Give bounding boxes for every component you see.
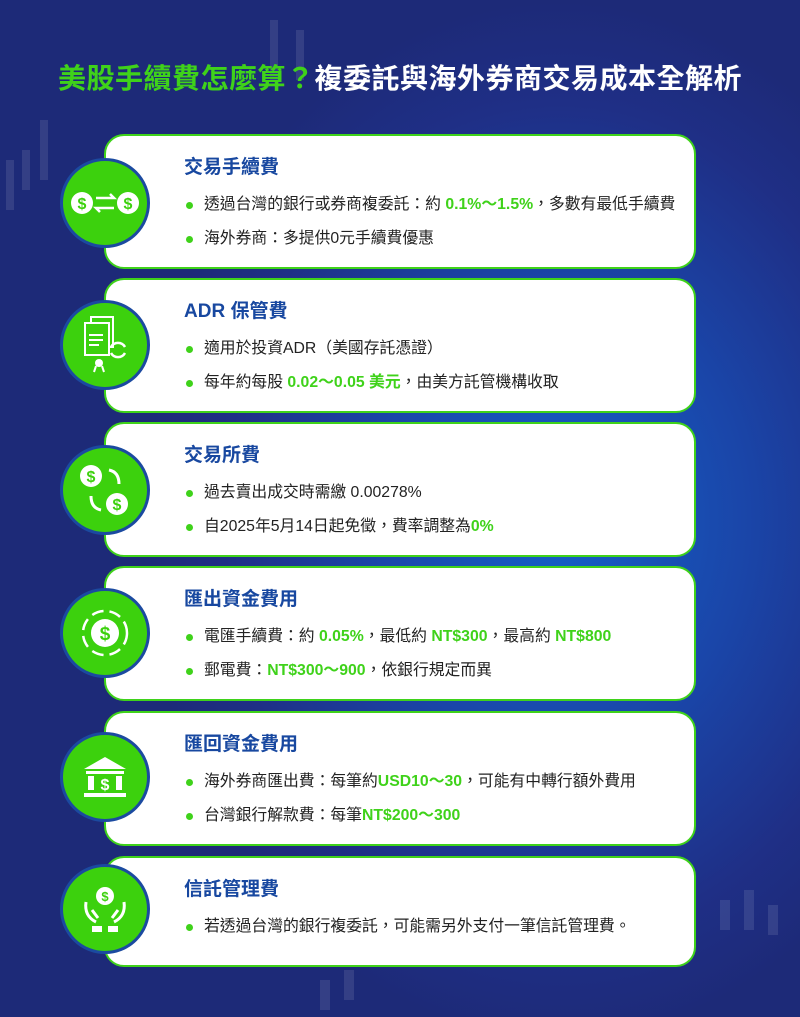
heading: 交易所費 bbox=[184, 445, 260, 466]
bullets: 電匯手續費：約 0.05%，最低約 NT$300，最高約 NT$800 bbox=[204, 628, 611, 645]
bullets: 海外券商：多提供0元手續費優惠 bbox=[204, 230, 434, 247]
icon: currency exchange: $ bbox=[78, 196, 87, 213]
bullets: 若透過台灣的銀行複委託，可能需另外支付一筆信託管理費。 bbox=[204, 918, 631, 935]
icon: bank: $ bbox=[101, 777, 110, 794]
icon: currency exchange bbox=[60, 158, 150, 248]
bullets: 自2025年5月14日起免徵，費率調整為0% bbox=[204, 518, 494, 535]
bullets bbox=[186, 627, 611, 679]
heading: 信託管理費 bbox=[184, 879, 279, 900]
panel: outbound remittance bbox=[104, 566, 696, 701]
bullets: 過去賣出成交時需繳 0.00278% bbox=[204, 484, 422, 501]
icon: dollar swap: $ bbox=[113, 497, 122, 514]
icon: documents bbox=[60, 300, 150, 390]
bullets: 郵電費：NT$300～900，依銀行規定而異 bbox=[204, 662, 492, 679]
icon: money cycle: $ bbox=[100, 624, 111, 645]
panel: exchange fee bbox=[104, 422, 696, 557]
bullets: 海外券商匯出費：每筆約USD10～30，可能有中轉行額外費用 bbox=[204, 773, 636, 790]
icon: hands with coin: $ bbox=[101, 889, 109, 904]
heading: ADR 保管費 bbox=[184, 301, 287, 322]
bullets bbox=[186, 339, 559, 391]
bullets: 透過台灣的銀行或券商複委託：約 0.1%～1.5%，多數有最低手續費 bbox=[204, 196, 675, 213]
panel: ADR bbox=[104, 278, 696, 413]
panel: inbound remittance bbox=[104, 711, 696, 846]
bullets: 每年約每股 0.02～0.05 美元，由美方託管機構收取 bbox=[204, 374, 559, 391]
bullets bbox=[186, 772, 636, 824]
icon: money cycle bbox=[60, 588, 150, 678]
icon: currency exchange: $ bbox=[124, 196, 133, 213]
bullets bbox=[186, 483, 494, 535]
icon: hands with coin bbox=[60, 864, 150, 954]
heading: 匯出資金費用 bbox=[184, 589, 298, 610]
bullets: 台灣銀行解款費：每筆NT$200～300 bbox=[204, 807, 460, 824]
heading: 交易手續費 bbox=[184, 157, 279, 178]
panel: trading fee bbox=[104, 134, 696, 269]
heading: 匯回資金費用 bbox=[184, 734, 298, 755]
bullets: 適用於投資ADR（美國存託憑證） bbox=[204, 340, 443, 357]
title: 美股手續費怎麼算？複委託與海外券商交易成本全解析 bbox=[58, 63, 742, 94]
icon: bank bbox=[60, 732, 150, 822]
icon: dollar swap bbox=[60, 445, 150, 535]
bullets bbox=[186, 195, 675, 247]
icon: dollar swap: $ bbox=[87, 469, 96, 486]
panel: trust fee bbox=[104, 856, 696, 967]
